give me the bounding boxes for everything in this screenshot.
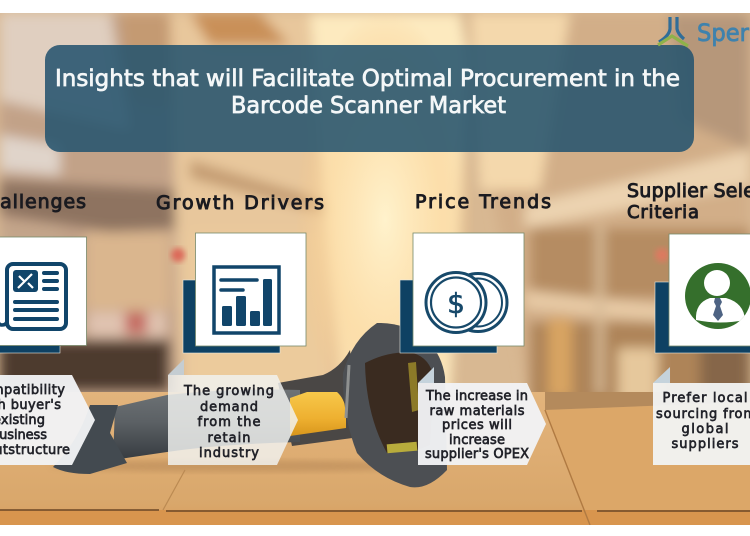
panel: challenges — [0, 191, 95, 465]
icon: coins — [426, 272, 507, 332]
callout text: Prefer local — [662, 391, 748, 406]
panel: supplier selection criteria — [627, 180, 750, 465]
callout fold — [653, 367, 670, 383]
callout text: The increase in — [425, 389, 528, 404]
heading: supplier selection criteria — [627, 180, 750, 223]
icon: person with tie — [685, 263, 750, 329]
panel: price trends: prices will — [442, 418, 512, 433]
callout fold — [168, 359, 184, 375]
heading: supplier selection criteria: Criteria — [627, 202, 699, 223]
title panel — [45, 45, 694, 152]
heading: price trends: Price Trends — [415, 191, 551, 213]
cardboard floor — [0, 392, 750, 532]
barcode scanner — [50, 323, 447, 487]
panel: price trends: raw materials — [430, 404, 525, 419]
panel: price trends: supplier's OPEX — [425, 447, 529, 462]
title panel: Barcode Scanner Market — [231, 91, 506, 119]
heading: growth drivers: Growth Drivers — [156, 192, 324, 214]
card: challenges — [0, 280, 60, 353]
panel: growth drivers: from the — [198, 415, 260, 430]
card: growth drivers — [183, 280, 280, 353]
card: supplier selection — [655, 282, 750, 353]
panel: supplier selection criteria: global — [682, 422, 728, 437]
callout: growth drivers — [168, 375, 298, 465]
icon: coins: $ — [447, 287, 465, 320]
panel: growth drivers: demand — [200, 400, 258, 415]
panel: growth drivers — [156, 192, 324, 465]
icon: logo mark — [658, 17, 688, 46]
callout: price trends — [418, 383, 546, 465]
warehouse shelves — [0, 13, 750, 407]
callout text: The growing — [183, 384, 274, 399]
panel: price trends: increase — [449, 433, 505, 448]
icon: newspaper — [0, 264, 66, 329]
logo: Sper — [658, 17, 749, 47]
callout fold — [418, 367, 434, 383]
panel: growth drivers: retain — [208, 431, 250, 446]
panel: supplier selection criteria: suppliers — [672, 437, 739, 452]
panel: growth drivers: industry — [199, 446, 259, 461]
callout: challenges — [0, 375, 95, 465]
card: price trends — [400, 280, 497, 353]
panel: price trends — [400, 191, 551, 465]
callout: supplier selection — [653, 383, 750, 465]
icon: bar chart report — [214, 267, 279, 333]
title text: Insights that will Facilitate Optimal Procurement in the — [55, 64, 680, 92]
